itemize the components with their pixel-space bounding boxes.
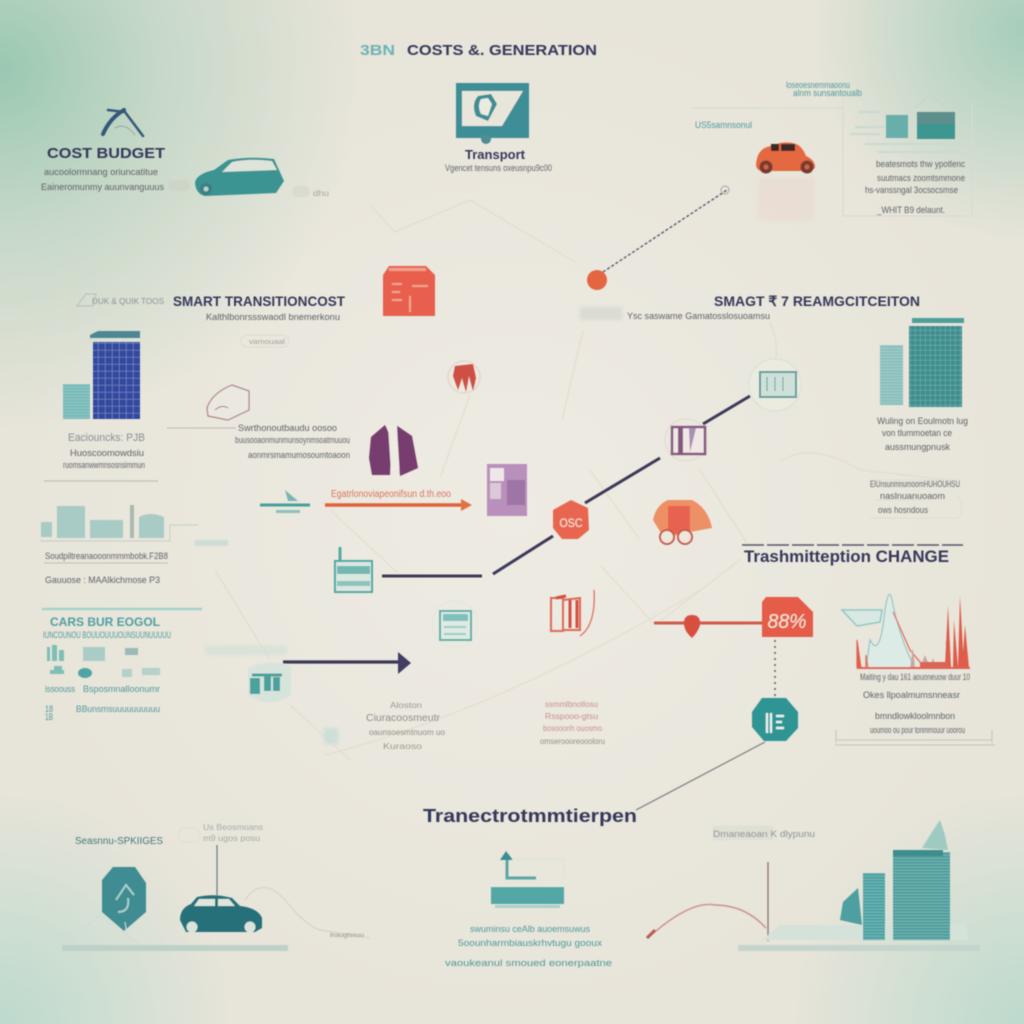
icon: tools xyxy=(103,110,143,136)
panel: bottom center: 5oounharmbiauskrhvtugu gooux xyxy=(458,938,603,948)
heading: Seasnnu-SPKIIGES xyxy=(75,836,163,847)
vertical line xyxy=(767,862,769,941)
text block: center left: aonmrsmamumosoumtoaoon xyxy=(248,450,350,460)
panel: cars book xyxy=(42,609,202,722)
panel: cars book: Bsposmnalloonumr xyxy=(83,684,160,694)
heading: SMAGT ₹ 7 REAMGCITCEITON xyxy=(714,293,920,309)
panel: cost budget: Eaineromunmy auunvanguuus xyxy=(41,182,164,192)
panel: left building: ruomsanwwmnsosnsimmun xyxy=(63,460,145,470)
panel: cars book: 18 xyxy=(45,704,53,714)
panel: smart reallocation: von tlummoetan ce xyxy=(882,428,952,438)
icon: purple box xyxy=(487,464,527,516)
body text: Maiting y dau 161 aouoneuow duur 10 xyxy=(860,672,970,682)
title text: COSTS &. GENERATION xyxy=(407,42,597,59)
body text: swuminsu ceAlb auoemsuwus xyxy=(470,924,590,934)
body text: Eaciouncks: PJB xyxy=(68,432,145,444)
panel: bottom right: Dmaneaoan K dlypunu xyxy=(713,829,815,839)
dark diagonal connector xyxy=(382,396,750,576)
chart xyxy=(842,594,970,668)
curve xyxy=(648,904,766,938)
captions: loseoesnemmaoonu xyxy=(786,80,850,90)
panel: skyline: Gauuose : MAAlkichmose P3 xyxy=(45,575,160,585)
panel: smart reallocation xyxy=(714,293,968,452)
text block: center: Kuraoso xyxy=(383,742,423,751)
panel: cars book: 1B xyxy=(45,712,53,722)
title number: 3BN xyxy=(360,42,395,59)
panel: bottom left: lnaugtssuu xyxy=(330,932,364,939)
panel: bottom right xyxy=(647,820,980,951)
icon: red box xyxy=(383,266,435,316)
panel: bottom center xyxy=(423,806,637,968)
text block: center left: buusooaonmunmunsoynmsoatmuuou xyxy=(235,435,350,445)
panel: side note box: ows hosndous xyxy=(878,505,928,515)
base xyxy=(62,945,288,951)
panel: transmission change: bmndlowkloolmnbon xyxy=(875,711,955,721)
text block: red center: bosooonh ouosmo xyxy=(543,724,602,733)
heading: CARS BUR EOGOL xyxy=(50,615,160,629)
body text: aucoolormnang oriuncatitue xyxy=(44,167,158,177)
faint captions xyxy=(168,180,310,197)
body text: Soudpiltreanaooonmmmbobk.F2B8 xyxy=(45,551,168,561)
list text: issoouss xyxy=(45,684,75,694)
caption: center line: Ysc saswame Gamatosslosuoamsu xyxy=(627,311,770,321)
icon: red book xyxy=(551,590,594,636)
text block: center left: Swrthonoutbaudu oosoo xyxy=(238,423,337,433)
icon: blue tower xyxy=(63,331,140,419)
heading: Tranectrotmmtierpen xyxy=(423,806,637,826)
text block: red center: Rsspooo-gtsu xyxy=(545,712,598,721)
text block: red center: ssmmlbnotlosu xyxy=(545,700,598,709)
icon: teal window badge xyxy=(432,601,478,647)
panel: top right building: alnm sunsantoualb xyxy=(793,88,862,98)
panel: transmission change: Okes llpoalmumsnneasr xyxy=(863,690,960,700)
dashed connector and pin xyxy=(587,186,729,290)
vertical line xyxy=(216,845,218,895)
node: teal hexagon xyxy=(752,698,798,741)
panel: top right building: hs-vanssngal 3ocsocsmse xyxy=(865,185,958,195)
small tag: vamouaal xyxy=(249,337,285,346)
panel: cars book: BBunsmsuuuuuuuuuu xyxy=(76,704,160,714)
subheading: Kalthlbonrssswaodl bnemerkonu xyxy=(206,312,340,322)
icon: small teal tag xyxy=(195,540,228,546)
faint connector lines xyxy=(215,200,950,760)
icon: teal crate xyxy=(335,547,372,592)
icon: teal container with dark arrow xyxy=(205,646,411,702)
icon: orange truck xyxy=(653,500,712,544)
curve xyxy=(245,888,370,938)
body text: Wuling on Eoulmotn lug xyxy=(877,416,968,426)
panel: transmission change: uoumoo ou pour tonmmouur uoorou xyxy=(870,725,965,735)
icon: teal car xyxy=(195,158,284,196)
small teal arrow icon xyxy=(260,490,310,513)
subheading: IUNCOUNOU BOUUOUUUOUNSUUNUUUUU xyxy=(43,630,171,640)
percent tag xyxy=(762,597,813,637)
icon: buildings xyxy=(850,95,960,152)
panel: top right building: US5samnsonul xyxy=(695,120,752,130)
orange arrow with label xyxy=(325,489,472,511)
title xyxy=(360,42,597,59)
icon: orange car xyxy=(756,142,815,220)
panel: cost budget xyxy=(41,110,329,198)
caption: center line xyxy=(580,307,770,321)
icon: teal sedan xyxy=(180,895,262,932)
panel: left building xyxy=(44,331,158,481)
panel: monitor xyxy=(445,83,552,173)
panel: transmission change xyxy=(742,545,995,745)
text block: center: Aloston xyxy=(390,701,422,710)
body text: beatesmots thw ypotlenc xyxy=(876,159,965,169)
bracket xyxy=(835,730,995,745)
orange arrow with label: Egatrlonoviapeonifsun d.th.eoo xyxy=(331,489,451,500)
icon: purple book badge xyxy=(665,419,707,461)
panel: side note box: EIUnsunmnumoomHUHOUHSU xyxy=(870,479,960,489)
arrow xyxy=(283,660,402,664)
caption: Vgencet tensuns oxeusnpu9c00 xyxy=(445,163,552,173)
text block: center xyxy=(324,701,446,751)
icon: outlined house xyxy=(167,385,249,428)
panel: smart transition cost xyxy=(77,293,345,347)
frame xyxy=(692,100,972,216)
panel: top right building: suutmacs zoomtsmmone xyxy=(877,173,965,183)
connector with pin and percent tag xyxy=(654,597,813,638)
panel: skyline xyxy=(40,505,198,585)
caption xyxy=(713,826,773,840)
text block: red center xyxy=(540,700,605,746)
text block: red center: omseroooreoooloru xyxy=(540,737,605,746)
text block: center: oaunsoesmtnuom uo xyxy=(369,728,446,737)
panel: cost budget: dhu xyxy=(313,189,329,198)
panel: side note box: naslnuanuoaom xyxy=(880,491,945,501)
heading: Transport xyxy=(465,148,526,162)
dotted link xyxy=(774,640,776,696)
heading: Trashmitteption CHANGE xyxy=(744,547,949,566)
icon: arrow and tray xyxy=(491,851,564,908)
panel: side note box xyxy=(870,479,962,518)
icon: teal badge xyxy=(102,867,146,931)
side caption: Us Beosmoans xyxy=(203,823,263,832)
heading: SMART TRANSITIONCOST xyxy=(173,293,345,309)
panel: left building: Huoscoomowdsiu xyxy=(70,448,144,458)
icon: purple jacket xyxy=(369,425,418,476)
icon: monitor xyxy=(456,83,529,144)
icon: red ornament xyxy=(448,361,480,393)
icon row xyxy=(47,645,160,678)
side caption: m9 ugos posu xyxy=(203,834,260,843)
panel: smart reallocation: aussmungpnusk xyxy=(885,442,950,452)
panel: top right building: _WHIT B9 delaunt. xyxy=(876,205,945,215)
thin leader line xyxy=(636,742,765,810)
icon: towers xyxy=(762,820,968,940)
panel: bottom center: vaoukeanul smoued eonerpaatne xyxy=(445,958,612,968)
connector with pin and percent tag: 88% xyxy=(768,611,806,633)
panel: top right building xyxy=(692,80,972,216)
base xyxy=(738,945,980,951)
side caption xyxy=(203,823,263,843)
node: OSC hexagon: OSC xyxy=(560,516,583,530)
heading: COST BUDGET xyxy=(47,145,165,162)
icon: teal tower xyxy=(880,318,964,407)
side caption: DUK & QUIK TOOS xyxy=(92,296,164,306)
text block: center left xyxy=(235,423,350,460)
text block: center: Ciuracoosmeutr xyxy=(366,713,441,724)
icon: skyline xyxy=(41,505,164,538)
panel: bottom left xyxy=(62,823,370,951)
icon: screen badge xyxy=(749,359,801,411)
node: OSC hexagon xyxy=(553,500,589,539)
